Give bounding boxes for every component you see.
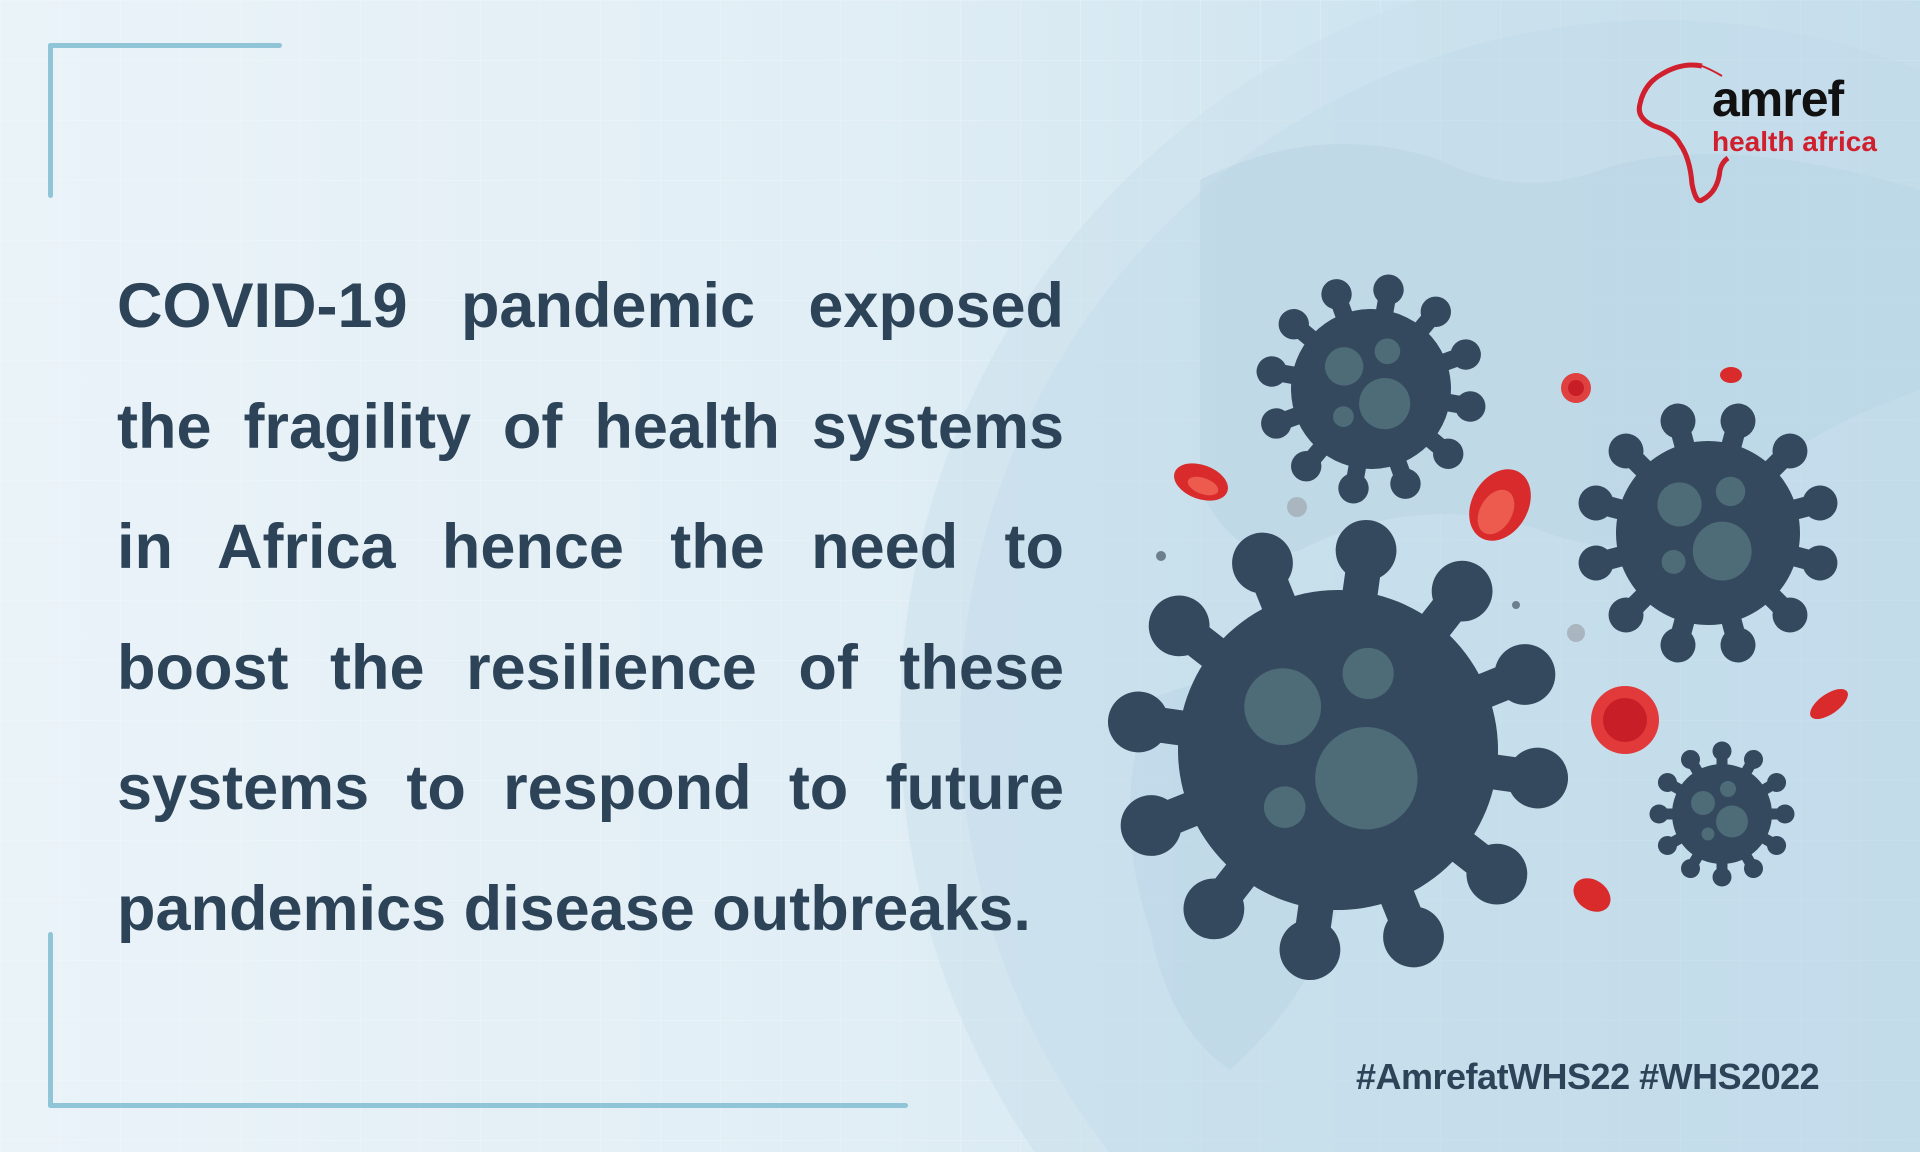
decorative bracket bottom-left — [48, 932, 53, 1108]
logo text: amref — [1712, 71, 1843, 127]
decorative bracket top-left — [48, 43, 282, 48]
logo: health africa — [1712, 126, 1877, 157]
main text block: COVID-19 pandemic exposed the fragility of health systems in Africa hence the need to boost the resilience of these systems to respond to future pandemics disease outbreaks. — [117, 271, 1064, 944]
virus: upper left — [1237, 255, 1505, 523]
blood cells — [1156, 367, 1853, 919]
virus: small — [1650, 742, 1794, 886]
virus: large — [1076, 488, 1600, 1012]
virus: right — [1545, 370, 1871, 696]
hashtags: #AmrefatWHS22 #WHS2022 — [1356, 1056, 1819, 1097]
icon: africa outline — [1636, 62, 1730, 204]
logo — [1636, 62, 1878, 204]
